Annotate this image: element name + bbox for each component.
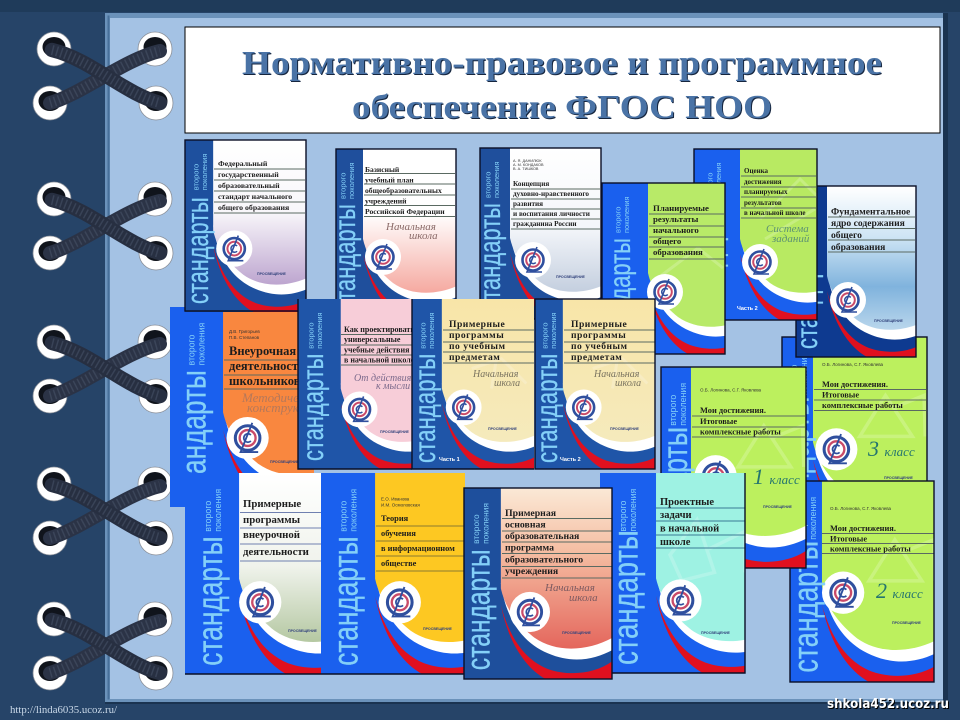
book: Примерная основная образовательная программа (445, 488, 668, 679)
book: Внеурочная деятельность школьников (164, 307, 399, 507)
cover text: Итоговые (822, 390, 859, 400)
cover text: И.М. Осмоловская (381, 502, 420, 508)
cover text: в начальной школе (744, 209, 806, 217)
book: Базисный учебный план: второго (338, 173, 348, 199)
cover text: школа (494, 378, 520, 389)
cover text: Е.О. Иванова (381, 496, 410, 502)
cover text (439, 319, 534, 463)
cover text: Часть 1 (439, 457, 460, 463)
cover text: программы (571, 330, 626, 341)
book: Примерные программы по учебным предметам, часть 2: стандарты (531, 354, 564, 463)
cover text: Российской Федерации (365, 207, 445, 216)
cover text (814, 362, 926, 480)
cover text: образовательного (505, 554, 583, 566)
book: Примерные программы внеурочной деятельности: стандарты (191, 536, 230, 666)
lace set 1 (33, 32, 173, 120)
cover text: общего образования (218, 203, 290, 212)
lace set 2 (33, 182, 173, 270)
book: Примерные программы по учебным предметам, часть 2 (513, 299, 712, 469)
cover text (376, 496, 465, 631)
cover text (240, 498, 321, 633)
book: Мои достижения 1 класс: второго (668, 395, 678, 426)
book: Проектные задачи в начальной школе: поколения (628, 489, 638, 531)
cover text: общего (653, 236, 682, 246)
book: Примерные программы по учебным предметам, часть 2: поколения (549, 312, 558, 349)
cover text: Проектные (660, 497, 714, 508)
cover text: А. М. КОНДАКОВ (513, 163, 544, 167)
cover text: Часть 2 (737, 306, 758, 312)
cover text: Примерные (571, 319, 627, 330)
cover text: В. А. ТИШКОВ (513, 167, 539, 171)
book: Оценка достижения планируемых результатов: поколения (714, 162, 723, 199)
book: Проектные задачи в начальной школе: стандарты (606, 530, 645, 665)
cover text: ПРОСВЕЩЕНИЕ (610, 427, 640, 431)
cover text (692, 388, 805, 509)
cover text: ПРОСВЕЩЕНИЕ (257, 272, 287, 276)
cover text: образовательная (505, 531, 580, 542)
cover text: учреждений (365, 196, 407, 206)
book: Как проектировать универсальные учебные действия: второго (306, 322, 315, 349)
book: Мои достижения 3 класс: второго (789, 364, 799, 395)
cover text (649, 203, 724, 259)
book: Как проектировать универсальные учебные действия: стандарты (297, 354, 330, 461)
book: Планируемые результаты (598, 183, 798, 354)
book: Фундаментальное ядро содержания (777, 186, 960, 357)
book: Как проектировать универсальные учебные действия (291, 299, 490, 469)
cover text: Д.В. Григорьев (229, 329, 260, 334)
cover text: по учебным (571, 341, 628, 352)
cover text: предметам (571, 352, 622, 363)
cover text: Система (766, 223, 809, 235)
cover text: Мои достижения. (830, 524, 896, 533)
cover text: начального (653, 225, 699, 235)
cover text: развития (513, 200, 543, 208)
cover text: Начальная (544, 582, 595, 594)
cover text: планируемых (744, 188, 788, 196)
cover text: достижения (744, 178, 782, 186)
book: Фундаментальное ядро содержания: поколения (809, 199, 818, 236)
title box (185, 27, 940, 133)
title text: обеспечение ФГОС НОО (352, 89, 772, 126)
book: Федеральный государственный стандарт: стандарты (182, 197, 215, 304)
book: Федеральный государственный стандарт (163, 140, 364, 312)
book: Примерные программы внеурочной деятельности: поколения (213, 489, 223, 532)
cover text: ядро содержания (831, 218, 905, 229)
lace set 3 (33, 325, 173, 413)
book: Мои достижения 3 класс: стандарты (777, 397, 816, 528)
book: Оценка достижения планируемых результатов (690, 149, 890, 320)
book: Проектные задачи в начальной школе: второго (618, 500, 628, 531)
cover text: школе (660, 537, 691, 548)
cover text: О.Б. Логинова, С.Г. Яковлева (830, 506, 892, 511)
cover text: предметам (449, 352, 500, 363)
cover text: Итоговые (700, 417, 737, 426)
cover text: основная (505, 520, 546, 530)
book: Базисный учебный план (313, 149, 513, 320)
cover text: Внеурочная (229, 344, 296, 358)
cover text: государственный (218, 170, 279, 179)
cover text: результатов (744, 199, 782, 207)
cover text: Теория (381, 514, 409, 523)
cover text: деятельность (229, 359, 305, 373)
cover text: Примерные (449, 319, 505, 330)
title text (242, 45, 882, 126)
cover text: школа (409, 230, 438, 242)
cover text: программы (449, 330, 504, 341)
book: Концепция духовно-нравственного развития (460, 148, 660, 319)
cover text: школа (569, 592, 598, 604)
cover text: ПРОСВЕЩЕНИЕ (884, 476, 914, 480)
cover text (737, 167, 816, 312)
book: Фундаментальное ядро содержания: стандарты (791, 241, 824, 349)
book: Федеральный государственный стандарт: поколения (200, 154, 209, 190)
cover text: Методический (241, 390, 324, 405)
book: Федеральный государственный стандарт: второго (192, 164, 201, 190)
cover text: обучения (381, 529, 416, 538)
cover text: О.Б. Логинова, С.Г. Яковлева (700, 388, 762, 392)
cover text: ПРОСВЕЩЕНИЕ (763, 505, 793, 509)
cover text: универсальные (344, 335, 401, 344)
book: Планируемые результаты: стандарты (604, 238, 637, 346)
cover text: комплексные работы (822, 401, 903, 410)
cover text: ПРОСВЕЩЕНИЕ (270, 460, 300, 464)
cover text: общеобразовательных (365, 186, 442, 195)
book: Мои достижения 1 класс (632, 367, 867, 568)
cover text: От действия (354, 373, 412, 384)
cover text: ПРОСВЕЩЕНИЕ (556, 275, 586, 279)
cover text: Мои достижения. (822, 380, 888, 389)
source credit, left: http://linda6035.ucoz.ru/ (10, 704, 118, 716)
cover text: учебные действия (344, 346, 410, 354)
book: Теория обучения в информационном обществе (316, 473, 551, 674)
book: Примерные программы по учебным предметам, часть 1 (392, 299, 591, 469)
cover text: Примерные (243, 498, 301, 510)
book: Внеурочная деятельность школьников: стандарты (174, 370, 213, 499)
cover text: 1 класс (753, 464, 800, 489)
book: Планируемые результаты: поколения (622, 196, 631, 233)
cover text: Концепция (513, 180, 549, 188)
book: Примерные программы по учебным предметам, часть 1: второго (418, 322, 427, 349)
cover text: в начальной (660, 524, 719, 534)
cover text: образования (653, 247, 703, 257)
cover text: Часть 2 (560, 457, 581, 463)
cover text (224, 329, 324, 464)
cover text (341, 325, 415, 434)
cover text: в начальной школе (344, 356, 415, 364)
cover text (560, 319, 655, 463)
cover text (511, 159, 600, 279)
cover text: комплексные работы (830, 544, 911, 554)
book: Примерная основная образовательная программа: второго (471, 514, 481, 544)
cover text: учебный план (365, 176, 414, 184)
cover text: ПРОСВЕЩЕНИЕ (562, 631, 592, 635)
cover text: по учебным (449, 341, 506, 352)
book: Мои достижения 2 класс (763, 481, 960, 682)
source credit, right: shkola452.ucoz.ru (827, 697, 949, 712)
book: Мои достижения 1 класс: поколения (678, 383, 688, 426)
cover text: Итоговые (830, 534, 867, 544)
book: Мои достижения 3 класс (755, 337, 960, 537)
cover text: ПРОСВЕЩЕНИЕ (488, 427, 518, 431)
cover text: образования (831, 242, 885, 253)
cover text: ПРОСВЕЩЕНИЕ (701, 631, 731, 635)
cover text: Федеральный (218, 159, 268, 168)
book: Мои достижения 3 класс: поколения (799, 353, 809, 395)
cover text: гражданина России (513, 220, 577, 228)
book: Примерная основная образовательная программа: стандарты (461, 549, 498, 670)
book: Примерные программы по учебным предметам, часть 1: стандарты (409, 354, 442, 463)
cover text: школа (615, 378, 641, 389)
book: Мои достижения 2 класс: стандарты (786, 541, 825, 673)
cover text: деятельности (243, 546, 309, 558)
cover text: П.В. Степанов (229, 335, 260, 340)
cover text: ПРОСВЕЩЕНИЕ (423, 627, 453, 631)
cover text: 2 класс (876, 578, 923, 603)
cover text: Мои достижения. (700, 406, 766, 415)
book: Мои достижения 1 класс: стандарты (656, 427, 695, 559)
book: Примерные программы внеурочной деятельности: второго (203, 501, 213, 532)
cover text (364, 165, 455, 242)
cover text: в информационном (381, 544, 455, 553)
cover text: Базисный (365, 165, 400, 174)
cover text: результаты (653, 214, 698, 224)
cover text: Как проектировать (344, 325, 415, 334)
book: Примерные программы внеурочной деятельности (180, 473, 415, 674)
cover text: Начальная (385, 221, 436, 233)
book: Примерные программы по учебным предметам, часть 1: поколения (427, 312, 436, 349)
book: Мои достижения 2 класс: второго (798, 509, 808, 540)
cover text (502, 508, 612, 635)
cover text: ПРОСВЕЩЕНИЕ (380, 430, 410, 434)
cover text: заданий (771, 233, 810, 245)
title text: Нормативно-правовое и программное (242, 45, 882, 82)
cover text: Фундаментальное (831, 206, 911, 218)
book: Теория обучения в информационном обществе: поколения (348, 489, 358, 532)
cover text: Примерная (505, 508, 557, 519)
book: Оценка достижения планируемых результатов: стандарты (696, 204, 729, 312)
cover text: внеурочной (243, 529, 300, 541)
book: Мои достижения 2 класс: поколения (808, 497, 818, 540)
book: Как проектировать универсальные учебные действия: поколения (315, 312, 324, 349)
book: Проектные задачи в начальной школе (598, 473, 831, 673)
cover text: Оценка (744, 167, 769, 175)
cover text: программы (243, 514, 301, 526)
cover text: стандарт начального (218, 192, 292, 201)
cover text: А. Я. ДАНИЛЮК (513, 159, 542, 163)
cover text (822, 506, 934, 625)
book: Оценка достижения планируемых результатов: второго (706, 173, 714, 199)
book: Теория обучения в информационном обществе: второго (338, 501, 348, 532)
cover text: школьников (229, 374, 301, 388)
book: Примерная основная образовательная программа: поколения (481, 503, 491, 544)
cover text: Начальная (472, 369, 519, 380)
lace set 5 (33, 602, 173, 690)
cover text (656, 497, 745, 635)
cover text: Начальная (593, 369, 640, 380)
cover text: образовательный (218, 181, 280, 190)
cover text: 3 класс (867, 436, 915, 461)
cover text (214, 159, 305, 276)
cover text: учреждения (505, 566, 559, 577)
cover text: конструктор (247, 400, 322, 415)
book: Базисный учебный план: поколения (347, 162, 356, 199)
book: Примерные программы по учебным предметам, часть 2: второго (540, 322, 549, 349)
cover text: комплексные работы (700, 428, 781, 436)
cover text: программа (505, 542, 554, 554)
cover text: обществе (381, 559, 417, 568)
cover text: к мысли (376, 381, 410, 392)
cover text: Планируемые (653, 203, 709, 213)
book: Планируемые результаты: второго (614, 207, 622, 233)
book: Концепция духовно-нравственного развития: стандарты (474, 203, 507, 311)
cover text: ПРОСВЕЩЕНИЕ (874, 319, 904, 323)
cover text: ПРОСВЕЩЕНИЕ (892, 621, 922, 625)
lace set 4 (33, 467, 173, 555)
book: Внеурочная деятельность школьников: поколения (196, 323, 206, 365)
cover text: задачи (660, 510, 692, 521)
book: Внеурочная деятельность школьников: второго (186, 334, 196, 365)
book: Фундаментальное ядро содержания: второго (800, 210, 810, 236)
book: Концепция духовно-нравственного развития: второго (484, 172, 492, 198)
cover text: общего (831, 230, 862, 241)
cover text: духовно-нравственного (513, 190, 589, 198)
cover text: и воспитания личности (513, 210, 590, 218)
cover text: ПРОСВЕЩЕНИЕ (288, 629, 318, 633)
cover text (828, 206, 915, 323)
book: Базисный учебный план: стандарты (329, 204, 362, 312)
book: Концепция духовно-нравственного развития: поколения (492, 161, 501, 198)
book: Теория обучения в информационном обществе: стандарты (326, 536, 365, 666)
cover text: О.Б. Логинова, С.Г. Яковлева (822, 362, 884, 367)
